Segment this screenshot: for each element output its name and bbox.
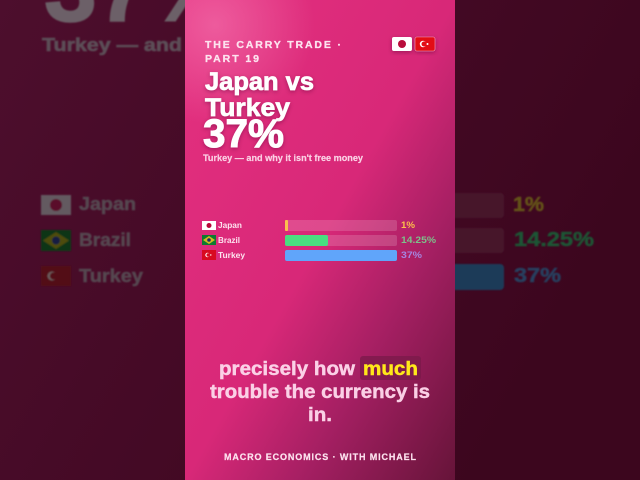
background row: Turkey (41, 266, 143, 286)
row: Brazil (202, 235, 436, 246)
background row: Brazil (41, 230, 131, 251)
row: Brazil: 14.25% (401, 235, 436, 245)
caption: precisely how (219, 358, 356, 380)
title (205, 68, 314, 122)
row: Turkey: 37% (401, 250, 422, 260)
centre panel (185, 0, 455, 480)
background subtitle: Turkey — and (42, 34, 182, 55)
background row: Brazil: Brazil (79, 230, 131, 250)
background row: Japan (41, 194, 136, 215)
background bar tracks (440, 193, 504, 290)
eyebrow heading: THE CARRY TRADE · (205, 39, 341, 51)
row: Turkey: Turkey (218, 251, 246, 260)
icon: flag Turkey (415, 37, 435, 51)
row: Japan (202, 220, 415, 231)
row: Brazil: Brazil (218, 236, 240, 245)
bar chart (202, 220, 436, 261)
eyebrow heading: PART 19 (205, 53, 259, 65)
background row: Turkey: Turkey (79, 266, 143, 286)
row: Japan: 1% (401, 220, 415, 230)
background values: 1% (513, 194, 544, 216)
caption (210, 356, 430, 426)
background row: Japan: Japan (79, 194, 136, 214)
big number: 37% (203, 112, 284, 156)
icon: flag Japan (392, 37, 412, 51)
title: Japan vs (205, 68, 314, 96)
footer: MACRO ECONOMICS · WITH MICHAEL (224, 452, 416, 462)
caption: in. (308, 404, 332, 426)
row: Japan: Japan (218, 221, 242, 230)
row: Turkey (202, 250, 422, 261)
highlighted word: much (363, 358, 418, 380)
caption: trouble the currency is (210, 381, 430, 403)
background values (513, 194, 594, 287)
subtitle: Turkey — and why it isn't free money (203, 153, 363, 163)
background values: 14.25% (514, 229, 594, 251)
eyebrow heading (205, 39, 341, 65)
title: Turkey (205, 94, 290, 122)
background values: 37% (514, 265, 561, 287)
